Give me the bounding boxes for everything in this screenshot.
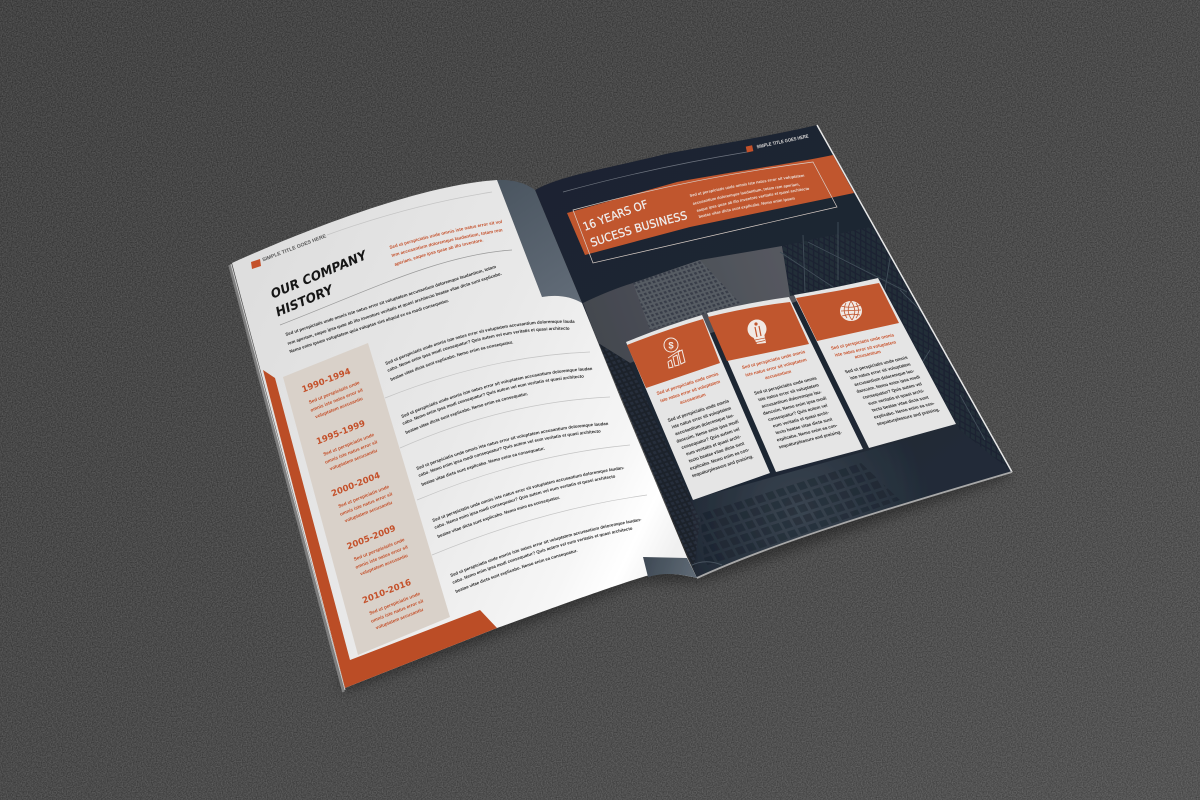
intro paragraph: Sed ut perspiciatis unde omnis iste natus error sit voluptatem accusantium doloremque laudantium, totam (286, 266, 496, 336)
header: simple title (251, 233, 328, 269)
timeline entry 1990-1994: Sed ut perspiciatis unde (308, 380, 361, 405)
card 2 body: accusantium doloremque lau- (761, 389, 823, 409)
card 1 body (666, 398, 754, 478)
intro paragraph: rem aperiam, eaque ipsa quae ab illo inventore veritatis et quasi architecto beatae vitae dicta sunt explicabo. (288, 273, 502, 345)
timeline entry 1995-1999: omnis iste natus error sit (324, 439, 378, 465)
card 1 heading: Sed ut perspiciatis unde omnis (656, 371, 720, 396)
timeline entry 2005-2009: 2005-2009 (346, 524, 397, 552)
timeline entry 1995-1999 (315, 416, 381, 473)
orange banner (567, 155, 854, 255)
row divider (432, 495, 647, 555)
page stack edge (230, 265, 344, 692)
card 1 body: eum veritatis et quasi archi- (685, 434, 742, 457)
panel: left page (228, 180, 697, 692)
card 3 body: tecto beatae vitae dicta sunt (871, 395, 930, 413)
page base (535, 125, 1012, 578)
banner description: beatae vitae dicta sunt explicabo. Nemo enim ipsam (698, 198, 795, 218)
banner description: eaque ipsa quae ab illo inventore veritatis et quasi architecto (696, 188, 810, 212)
card 2 heading (741, 349, 811, 385)
paragraph row 3: beatae vitae dicta sunt explicabo. Nemo enim ea consequatur. (421, 448, 545, 486)
card 3 body (843, 355, 941, 426)
header: simple title (746, 133, 810, 152)
icon: coin and bar chart: $ (668, 340, 674, 352)
paragraph row 2: Sed ut perspiciatis unde omnis iste natus error sit voluptatem accusantium doloremque laudan- (401, 250, 592, 418)
paragraph row 2 (401, 250, 592, 434)
row divider (417, 445, 630, 500)
timeline entry 2005-2009: omnis iste natus error sit (355, 544, 409, 570)
orange intro text: tem accusantium doloremque laudantium, totam rem (391, 229, 502, 257)
card 2 body: sequaturpleasure and praising. (778, 429, 842, 449)
timeline entry 1995-1999: voluptatem accusantiu (329, 448, 378, 471)
card 2 body (753, 375, 843, 450)
paragraph row 3: cabo. Nemo enim ipsa modi consequatur? Quis autem vel eum veritatis et quasi architecto (418, 430, 600, 477)
paragraph row 1 (385, 250, 581, 400)
orange intro text: aperiam, eaque ipsa quae ab illo inventore. (394, 240, 484, 266)
card 1 body: Sed ut perspiciatis unde omnis (667, 398, 730, 423)
paragraph row 5: beatae vitae dicta sunt explicabo. Nemo enim ea consequatur. (455, 550, 578, 593)
row divider (385, 352, 590, 398)
header rule (563, 152, 747, 192)
orange frame (263, 370, 497, 688)
gutter grey tab top (497, 180, 582, 303)
icon: globe (840, 301, 862, 320)
paragraph row 4: cabo. Nemo enim ipsa modi consequatur? Quis autem vel eum veritatis et quasi architecto (434, 475, 616, 529)
banner description: accusantium doloremque laudantium, totam rem aperiam, (692, 184, 800, 205)
card 3 body: consequatur? Quis autem vel (861, 381, 923, 400)
title: HISTORY (275, 282, 334, 321)
timeline entry 2010-2016: omnis iste natus error sit (370, 598, 424, 624)
card 3 heading: iste natus error sit voluptatem (834, 340, 897, 358)
timeline entry 2010-2016: voluptatem accusantiu (375, 607, 424, 630)
card 3 (794, 278, 956, 448)
timeline entry 2000-2004 (330, 468, 396, 525)
title rule (280, 250, 512, 325)
card 3 body: sequaturpleasure and praising. (876, 407, 941, 426)
paragraph row 5: Sed ut perspiciatis unde omnis iste natus error sit voluptatem accusantium doloremque laudan- (450, 518, 642, 577)
timeline entry 2010-2016 (361, 575, 427, 632)
card 3 body: eum veritatis et quasi archi- (867, 388, 926, 406)
card 1 body: sequaturpleasure and praising. (691, 454, 754, 478)
card 2 heading: iste natus error sit voluptatem (745, 357, 807, 378)
card 2 body: tecto beatae vitae dicta sunt (775, 416, 834, 435)
timeline entry 2010-2016: Sed ut perspiciatis unde (369, 591, 421, 616)
card 2 body: consequatur? Quis autem vel (767, 403, 828, 422)
orange intro text (390, 220, 506, 266)
paragraph row 3 (416, 250, 608, 486)
timeline entry 1990-1994: omnis iste natus error sit (310, 387, 364, 413)
paragraph row 4: Sed ut perspiciatis unde omnis iste natus error sit voluptatem accusantium doloremque laudan- (432, 466, 624, 522)
inner white page edge (231, 264, 345, 690)
paragraph row 3: Sed ut perspiciatis unde omnis iste natus error sit voluptatem accusantium doloremque laudan- (416, 250, 608, 470)
card 3 body: iste natus error sit voluptatem (849, 362, 912, 381)
card 2 body: Sed ut perspiciatis unde omnis (753, 375, 818, 396)
grey bottom edge of page (697, 472, 1012, 578)
banner title: 16 YEARS OF (582, 200, 647, 231)
timeline entry 2000-2004: voluptatem accusantiu (344, 500, 393, 523)
timeline entry 2005-2009: Sed ut perspiciatis unde (353, 537, 406, 562)
banner outline (573, 162, 837, 263)
paragraph row 1: beatae vitae dicta sunt explicabo. Nemo enim ea consequatur. (390, 341, 514, 381)
beige timeline panel (283, 343, 450, 655)
card 3 body: explicabo. Nemo enim ea con- (873, 401, 936, 420)
timeline entry 2000-2004: 2000-2004 (330, 471, 382, 499)
paragraph row 1: cabo. Nemo enim ipsa modi consequatur? Quis autem vel eum veritatis et quasi architecto (388, 326, 570, 372)
card 1 body: consequatur? Quis autem vel (681, 426, 740, 450)
timeline entry 1990-1994 (301, 364, 366, 421)
title: OUR COMPANY (270, 248, 368, 303)
card 2 heading: accusantium (764, 369, 792, 380)
timeline entry 1990-1994: 1990-1994 (301, 367, 352, 395)
card 2 body: iste natus error sit voluptatem (757, 383, 820, 402)
header: simple title: SIMPLE TITLE GOES HERE (262, 233, 328, 263)
white right edge of page (817, 125, 1012, 472)
intro paragraph: Nemo enim ipsam voluptatem quia voluptas sint aliquid ex ea modi consequatur. (289, 300, 449, 353)
card 1 body: explicabo. Nemo enim ea con- (689, 447, 751, 471)
orange intro text: Sed ut perspiciatis unde omnis iste natus error sit volupta- (390, 220, 506, 256)
card 3 body: accusantium doloremque lau- (853, 368, 916, 387)
paragraph row 1: Sed ut perspiciatis unde omnis iste natus error sit voluptatem accusantium doloremque laudan- (385, 250, 581, 400)
card 1 body: tecto beatae vitae dicta sunt (688, 441, 746, 464)
icon: light bulb (748, 320, 766, 344)
bottom grey tab (643, 557, 697, 578)
panel: right page (535, 124, 1013, 579)
timeline entry 1990-1994: voluptatem accusantiu (315, 396, 363, 419)
paragraph row 2: cabo. Nemo enim ipsa modi consequatur? Quis autem vel eum veritatis et quasi architecto (402, 375, 584, 425)
icon: coin and bar chart (664, 338, 685, 368)
timeline entry 1995-1999: Sed ut perspiciatis unde (323, 432, 375, 457)
timeline entry 2000-2004: Sed ut perspiciatis unde (338, 484, 390, 509)
card 3 heading: Sed ut perspiciatis unde omnis (830, 332, 895, 351)
timeline entry 2010-2016: 2010-2016 (361, 578, 413, 606)
card 3 body: dancuim. Nemo enim ipsa modi (855, 374, 921, 394)
brochure drop shadow (340, 465, 1012, 692)
card 1 body: iste natus error sit voluptatem (671, 405, 732, 430)
card 1 (626, 315, 770, 500)
paragraph row 4: beatae vitae dicta sunt explicabo. Nemo enim ea consequatur. (437, 496, 560, 538)
card 1 body: dancuim. Nemo enim ipsa modi (675, 419, 739, 444)
card 1 heading: iste natus error sit voluptatem (659, 379, 721, 403)
card 2 body: explicabo. Nemo enim ea con- (776, 423, 839, 442)
card 3 body: Sed ut perspiciatis unde omnis (844, 355, 909, 374)
card 1 body: accusantium doloremque lau- (674, 412, 735, 436)
header: simple title: SIMPLE TITLE GOES HERE (756, 133, 810, 150)
card 1 heading: accusantium (679, 392, 706, 405)
card 2 heading: Sed ut perspiciatis unde omnis (741, 349, 806, 370)
banner description: Sed ut perspiciatis unde omnis iste natus error sit voluptatem (690, 174, 804, 197)
card 1 heading (656, 371, 725, 411)
timeline entry 2000-2004: omnis iste natus error sit (339, 491, 393, 517)
paragraph row 5: cabo. Nemo enim ipsa modi consequatur? Quis autem vel eum veritatis et quasi architecto (452, 527, 632, 584)
paragraph row 2: beatae vitae dicta sunt explicabo. Nemo enim ea consequatur. (405, 392, 528, 434)
page sheet (232, 180, 697, 688)
timeline entry 1995-1999: 1995-1999 (315, 419, 367, 447)
skyline photo (583, 222, 1012, 578)
card 2 body: eum veritatis et quasi archi- (772, 410, 830, 428)
card 3 heading (830, 332, 901, 364)
card 2 (707, 297, 863, 472)
card 2 body: dancuim. Nemo enim ipsa modi (762, 396, 827, 416)
card 3 heading: accusantium (854, 349, 882, 360)
panel: right page: SUCESS BUSINESS (590, 211, 687, 246)
timeline entry 2005-2009: voluptatem accusantiu (360, 553, 408, 576)
timeline entry 2005-2009 (346, 521, 411, 578)
header rule (327, 192, 492, 235)
banner description (690, 174, 810, 218)
row divider (400, 397, 610, 448)
